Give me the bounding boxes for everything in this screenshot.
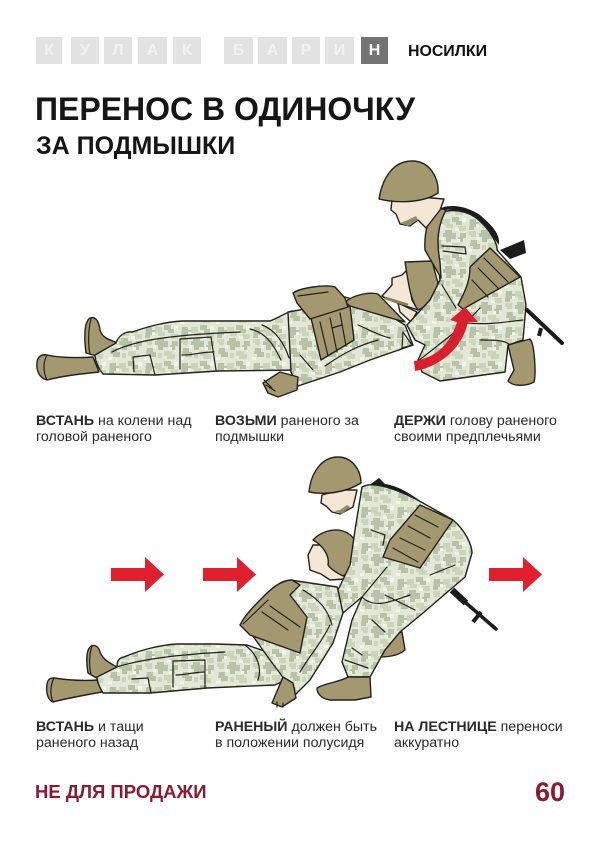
rescuer vest bbox=[383, 505, 453, 568]
caption: drag: раненого назад bbox=[36, 735, 138, 751]
illustration: rescuer drags the casualty backward bbox=[47, 457, 496, 707]
rifle on back bbox=[500, 240, 562, 343]
rescuer uniform bbox=[407, 211, 526, 381]
caption: stairs bbox=[394, 719, 563, 751]
rescuer kneeling bbox=[379, 161, 562, 385]
header: series name letter tiles: Б bbox=[233, 42, 244, 59]
header: series name letter tiles: А bbox=[267, 42, 278, 59]
header: series name letter tiles: У bbox=[80, 42, 90, 59]
caption: hold: ДЕРЖИ голову раненого bbox=[394, 413, 557, 429]
casualty hand bbox=[272, 677, 296, 707]
red arrow 1 bbox=[111, 557, 164, 592]
casualty neck and face bbox=[398, 303, 417, 322]
caption: half-sitting bbox=[215, 718, 377, 751]
casualty boots bbox=[37, 318, 118, 380]
casualty lying on the ground bbox=[37, 261, 438, 397]
header: series name letter tiles: К bbox=[182, 42, 192, 59]
caption: drag bbox=[36, 719, 144, 751]
caption: hold bbox=[394, 413, 557, 445]
title: ПЕРЕНОС В ОДИНОЧКУ bbox=[35, 91, 415, 127]
rescuer vest bbox=[425, 208, 520, 309]
casualty legs bbox=[95, 311, 300, 375]
rescuer helmet bbox=[379, 161, 438, 202]
casualty torso and arm bbox=[250, 580, 345, 698]
header: series name letter tiles: Л bbox=[112, 42, 124, 59]
casualty helmet bbox=[313, 530, 357, 576]
caption: kneel: ВСТАНЬ на колени над bbox=[36, 413, 192, 429]
casualty torso and arm bbox=[288, 297, 413, 386]
header: series name letter tiles: Р bbox=[301, 42, 311, 59]
caption: kneel bbox=[36, 413, 192, 445]
casualty helmet bbox=[405, 261, 438, 310]
casualty half-sitting bbox=[47, 530, 357, 707]
backpack strap bbox=[360, 478, 426, 507]
caption: half-sitting: в положении полусидя bbox=[215, 735, 364, 751]
rescuer helmet bbox=[309, 457, 361, 493]
casualty legs bbox=[97, 644, 292, 693]
header: series name letter tiles: К bbox=[44, 42, 54, 59]
casualty boots bbox=[47, 645, 117, 702]
caption: grab bbox=[215, 413, 359, 445]
front boot bbox=[317, 677, 371, 700]
caption: half-sitting: РАНЕНЫЙ должен быть bbox=[215, 719, 377, 735]
caption: hold: своими предплечьями bbox=[394, 429, 541, 445]
casualty vest and pouch bbox=[293, 286, 412, 360]
rear boot bbox=[378, 632, 405, 657]
header: series name letter tiles: И bbox=[334, 42, 345, 59]
rifle bbox=[452, 590, 496, 629]
red arrow 2 bbox=[203, 557, 256, 592]
subtitle: ЗА ПОДМЫШКИ bbox=[36, 132, 235, 160]
red curved arrow bbox=[414, 307, 478, 371]
header: series name letter tiles: Н bbox=[369, 42, 380, 59]
header: series name letter tiles: А bbox=[147, 42, 158, 59]
casualty face bbox=[308, 545, 350, 580]
backpack strap bbox=[433, 206, 499, 245]
rear boot bbox=[508, 339, 535, 385]
rescuer uniform bbox=[338, 485, 472, 677]
caption: drag: ВСТАНЬ и тащи bbox=[36, 719, 144, 735]
casualty hand bbox=[263, 372, 298, 397]
caption: grab: ВОЗЬМИ раненого за bbox=[215, 413, 359, 429]
footer: not for sale: НЕ ДЛЯ ПРОДАЖИ bbox=[35, 781, 207, 802]
rescuer bent over bbox=[309, 457, 496, 700]
caption: stairs: аккуратно bbox=[394, 735, 459, 751]
rescuer face bbox=[321, 490, 357, 514]
red arrow 3 bbox=[489, 557, 542, 592]
caption: stairs: НА ЛЕСТНИЦЕ переноси bbox=[394, 719, 563, 735]
rescuer face bbox=[391, 197, 444, 228]
casualty vest and pouch bbox=[240, 580, 307, 653]
header: series name letter tiles bbox=[36, 37, 388, 64]
section label: НОСИЛКИ bbox=[408, 43, 487, 60]
caption: grab: подмышки bbox=[215, 429, 284, 445]
caption: kneel: головой раненого bbox=[36, 429, 152, 445]
page number: 60 bbox=[535, 777, 565, 807]
